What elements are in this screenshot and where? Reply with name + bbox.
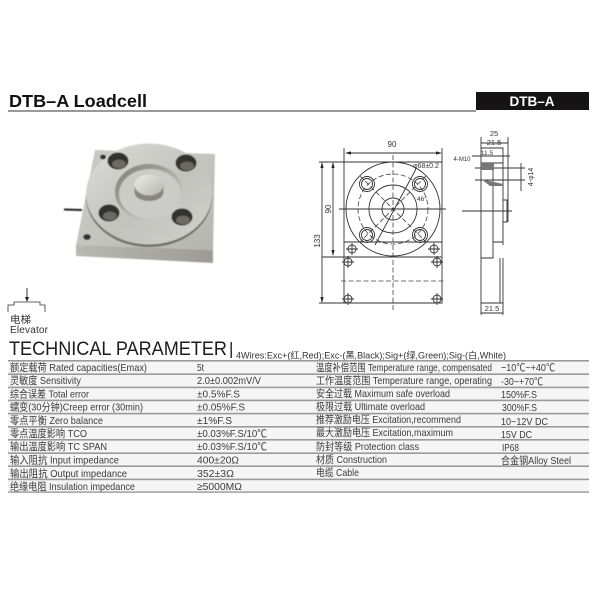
left column labels: 输入阻抗 Input impedance bbox=[10, 454, 119, 466]
table rules bbox=[8, 360, 589, 493]
right column labels: 温度补偿范围 Temperature range, compensated bbox=[316, 361, 492, 374]
left column values: ±0.05%F.S bbox=[197, 402, 245, 414]
right column values: 合金钢Alloy Steel bbox=[501, 454, 571, 467]
left column values: ±0.03%F.S/10℃ bbox=[197, 428, 267, 440]
right column labels: 材质 Construction bbox=[316, 453, 387, 466]
model badge: DTB–A bbox=[509, 94, 555, 109]
base plate bbox=[76, 150, 215, 250]
technical drawing: side view: 25 bbox=[490, 129, 498, 138]
left column values: 400±20Ω bbox=[197, 454, 239, 466]
right column labels: 最大激励电压 Excitation,maximum bbox=[316, 426, 453, 439]
right column labels bbox=[316, 361, 492, 479]
right column values: 150%F.S bbox=[501, 389, 537, 401]
right column values: −10℃~+40℃ bbox=[501, 362, 555, 374]
cable bbox=[64, 208, 82, 211]
technical drawing: front view: φ68±0.2 bbox=[413, 163, 439, 170]
left column values: ±0.03%F.S/10℃ bbox=[197, 441, 267, 453]
left column labels: 零点温度影响 TCO bbox=[10, 427, 87, 440]
right column labels: 推荐激励电压 Excitation,recommend bbox=[316, 413, 461, 426]
section heading: technical parameter: TECHNICAL PARAMETER bbox=[9, 339, 227, 360]
technical drawing: front view: 133 bbox=[313, 234, 322, 248]
table row backgrounds bbox=[8, 361, 589, 492]
left column labels: 额定载荷 Rated capacities(Emax) bbox=[10, 361, 147, 374]
left column labels bbox=[10, 361, 147, 493]
left column values: ≥5000MΩ bbox=[197, 481, 242, 493]
parameter table bbox=[8, 360, 589, 493]
technical drawing: side view: 11.5 bbox=[481, 150, 493, 157]
centre post bbox=[134, 185, 164, 201]
left column labels: 输出温度影响 TC SPAN bbox=[10, 440, 107, 453]
technical drawing: side view: 4-φ14 bbox=[528, 168, 535, 186]
right column labels: 电缆 Cable bbox=[316, 466, 359, 479]
elevator icon and label bbox=[8, 288, 49, 336]
left column values: ±0.5%F.S bbox=[197, 388, 240, 400]
left column labels: 绝缘电阻 Insulation impedance bbox=[10, 480, 135, 493]
technical drawing: front view: 90 bbox=[388, 140, 397, 149]
left column values: ±1%F.S bbox=[197, 415, 232, 427]
right column values bbox=[501, 362, 571, 467]
technical drawing: side view: 21.5 bbox=[485, 304, 499, 313]
right column values: IP68 bbox=[502, 442, 519, 454]
model badge bbox=[476, 92, 589, 110]
right column values: 15V DC bbox=[501, 429, 532, 441]
dimension lines bbox=[322, 153, 440, 302]
technical drawing: side view: 21.5 bbox=[487, 138, 501, 147]
right column values: -30~+70℃ bbox=[501, 376, 543, 388]
technical drawing: side view bbox=[453, 129, 535, 315]
screws bbox=[342, 243, 443, 305]
elevator icon and label: 电梯 bbox=[10, 313, 31, 326]
right column labels: 防封等级 Protection class bbox=[316, 440, 419, 453]
title underline bbox=[8, 110, 476, 112]
left column values: 5t bbox=[197, 362, 204, 374]
right column labels: 工作温度范围 Temperature range, operating bbox=[316, 374, 492, 387]
right column values: 300%F.S bbox=[502, 402, 537, 414]
mounting holes bbox=[83, 152, 196, 240]
left column labels: 综合误差 Total error bbox=[10, 388, 89, 400]
left column labels: 蠕变(30分钟)Creep error (30min) bbox=[10, 400, 143, 414]
left column values bbox=[197, 362, 267, 493]
right column values: 10~12V DC bbox=[501, 416, 548, 428]
technical drawing: front view bbox=[313, 140, 446, 310]
wiring note: 4Wires:Exc+(红,Red);Exc-(黑,Black);Sig+(绿,Green);Sig-(白,White) bbox=[236, 350, 506, 360]
elevator icon and label: Elevator bbox=[10, 325, 49, 336]
technical drawing: front view: 46° bbox=[417, 195, 427, 203]
technical drawing: side view: 4-M10 bbox=[453, 157, 471, 163]
technical drawing: front view: 90 bbox=[324, 204, 333, 213]
left column labels: 灵敏度 Sensitivity bbox=[10, 374, 82, 387]
product photo: loadcell bbox=[64, 144, 215, 263]
title: DTB–A Loadcell bbox=[9, 91, 147, 111]
left column values: 352±3Ω bbox=[197, 468, 234, 480]
flange disc bbox=[86, 147, 212, 247]
right column labels: 安全过载 Maximum safe overload bbox=[316, 387, 450, 400]
centre recess bbox=[115, 164, 183, 220]
right column labels: 极限过载 Ultimate overload bbox=[316, 400, 425, 413]
left column labels: 输出阻抗 Output impedance bbox=[10, 467, 127, 480]
left column values: 2.0±0.002mV/V bbox=[197, 375, 261, 387]
left column labels: 零点平衡 Zero balance bbox=[10, 415, 103, 427]
